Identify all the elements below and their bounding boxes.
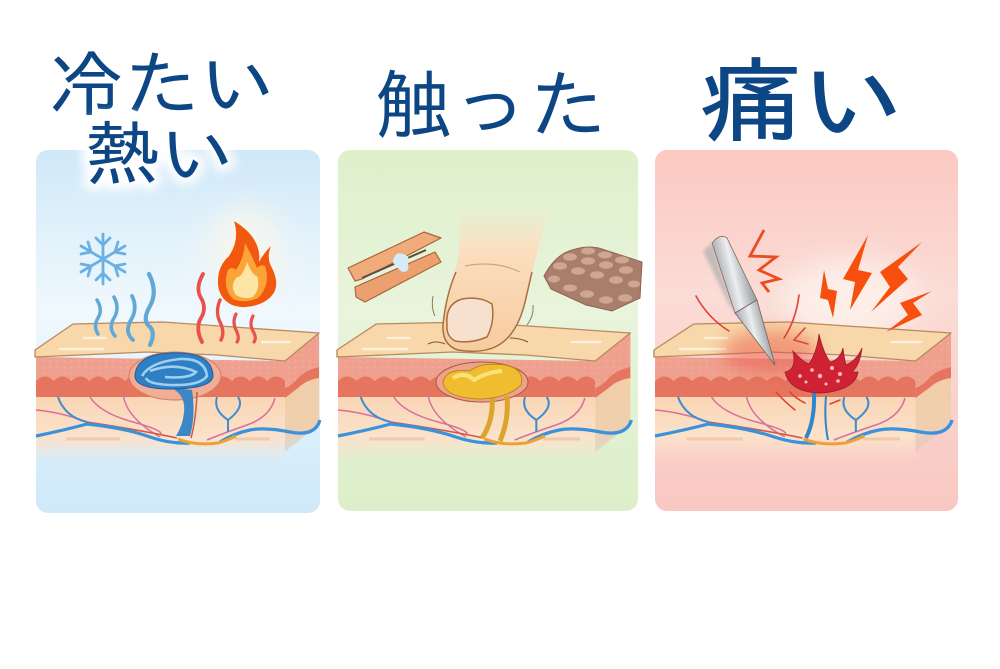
receptor: yellow corpuscle <box>436 362 528 441</box>
redness around injury <box>722 330 818 374</box>
icon: heat waves <box>198 274 255 342</box>
icon: small red zigzag <box>750 230 779 292</box>
title: cold: 冷たい <box>48 47 276 119</box>
icon: clothespin <box>348 232 441 302</box>
skin cross-section: pain <box>654 322 952 462</box>
title: touched: 触った <box>375 67 607 142</box>
receptor: blue coil <box>129 352 221 438</box>
title: hot with glow: 熱い <box>85 118 235 188</box>
receptor: red spiky nerve <box>785 334 862 440</box>
icon: needle <box>703 236 775 365</box>
skin cross-section: cold and hot <box>35 322 320 462</box>
glow behind flame <box>207 205 283 295</box>
icon: textured fabric <box>544 247 642 311</box>
panel: touch <box>337 67 642 511</box>
pain strokes <box>696 295 840 410</box>
icon: flame <box>218 221 276 307</box>
icon: snowflake <box>81 234 125 284</box>
panel: pain <box>654 54 958 511</box>
title: hot with glow: 熱い <box>85 118 235 188</box>
skin cross-section: touch <box>337 322 631 462</box>
title: painful: 痛い <box>699 54 905 146</box>
icon: lightning bolts <box>820 235 932 332</box>
icon: cold waves <box>96 274 154 345</box>
icon: pressing finger <box>428 205 550 351</box>
white glow behind bolts <box>780 260 920 340</box>
panel: cold and hot <box>35 47 320 513</box>
